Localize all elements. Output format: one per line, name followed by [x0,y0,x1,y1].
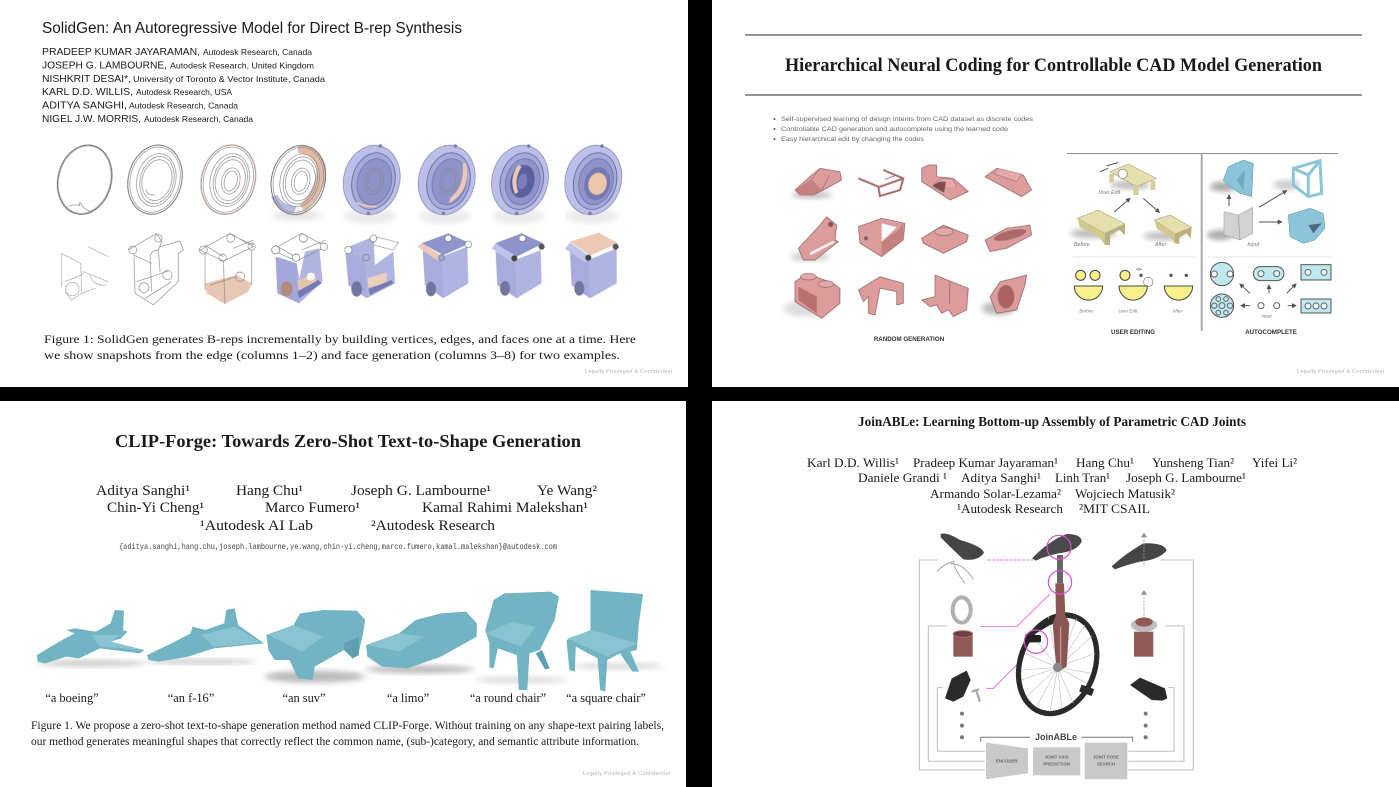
part: seat right [1112,543,1167,569]
author list: Autodesk Research, USA [136,88,233,97]
table: user edit [1109,164,1157,195]
author list [42,47,325,125]
dots left [960,712,964,739]
author names: Aditya Sanghi¹ [961,470,1041,485]
disc stage 6 [411,139,482,224]
figure caption: our method generates meaningful shapes that correctly reflect the common name, (sub-)category, and semantic attribute information. [31,736,639,748]
magenta connector lines [980,560,1050,688]
disc stage 8 [558,139,629,224]
bracket: JoinABLe [981,732,1133,742]
figure: autocomplete: Input [1247,242,1260,248]
shape captions: “a round chair” [470,691,546,705]
figure: user editing [1070,163,1193,314]
author names: Aditya Sanghi¹ [96,483,190,499]
figure: user editing: After [1171,309,1183,314]
bullet list [774,116,1034,143]
shape: square chair [566,590,643,692]
bracket stage 4 [272,233,328,303]
email address: {aditya.sanghi,hang.chu,joseph.lambourne,ye.wang,chin-yi.cheng,marco.fumero,kamal.malekshan}@autodesk.com [119,543,557,552]
bracket stage 8 [565,233,619,298]
unicycle frame [1025,534,1082,673]
shape: round chair [485,592,559,690]
bracket stage 1 [62,247,108,300]
table: before [1077,210,1125,245]
shape captions: “an suv” [282,691,326,705]
author names: Hang Chu¹ [236,483,303,499]
bracket: JoinABLe: JoinABLe [1035,732,1077,742]
panel: JoinABLe paper [712,401,1399,787]
part: seat clamp left [937,562,973,583]
bullet list: Easy hierarchical edit by changing the codes [781,136,925,143]
author names: Hang Chu¹ [1076,455,1134,470]
bracket stage 7 [492,233,545,298]
shape: input grey [1224,207,1253,240]
figure caption [31,720,664,748]
part: pedal right [1130,678,1167,701]
author names: Wojciech Matusik² [1075,486,1175,501]
smiley: user edit [1119,267,1153,300]
block: joint axis prediction: JOINT AXIS [1045,755,1069,760]
footer note: Legally Privileged & Confidential [1297,369,1384,375]
author list: ADITYA SANGHI, [42,101,127,112]
author names: Ye Wang² [537,483,597,499]
figure caption: Figure 1: SolidGen generates B-reps incrementally by building vertices, edges, and faces one at a time. Here [44,334,636,346]
footer note: Legally Privileged & Confidential [585,369,672,375]
disc stage 7 [484,139,556,224]
author names: Joseph G. Lambourne¹ [1126,470,1246,485]
block: joint pose search [1085,743,1127,779]
panel: CLIP-Forge paper [0,401,686,787]
figure: user editing: Before [1079,309,1093,314]
grey connector lines [919,560,1193,770]
figure: user editing: Before [1074,242,1090,248]
smiley: before [1074,270,1103,300]
object 10 [858,277,903,315]
title: JoinABLe: JoinABLe: Learning Bottom-up Assembly of Parametric CAD Joints [858,414,1246,429]
bracket stage 2 [128,233,183,305]
author names: Daniele Grandi ¹ [858,470,947,485]
figure: autocomplete: Input [1261,314,1272,319]
shape: limo [366,612,477,668]
author names: Marco Fumero¹ [265,500,360,516]
shape: top left blue [1223,160,1253,197]
title: CLIP-Forge: CLIP-Forge: Towards Zero-Shot Text-to-Shape Generation [115,431,581,451]
author names [96,483,597,534]
disc stage 5 [336,139,407,224]
object 3 [922,165,968,200]
author names: ²Autodesk Research [371,518,495,534]
block: joint axis prediction [1033,747,1080,775]
author names: Yifei Li² [1252,455,1297,470]
block: encoder: ENCODER [996,759,1018,764]
author names: Karl D.D. Willis¹ [807,455,899,470]
bullet list: Controllable CAD generation and autocomplete using the learned code [781,126,1008,133]
label: user editing: USER EDITING [1111,329,1155,336]
author names: ¹Autodesk AI Lab [200,518,313,534]
axis arrow right top [1141,533,1147,567]
author list: JOSEPH G. LAMBOURNE, [42,61,167,72]
figure: autocomplete [1207,160,1331,319]
figure: user editing: After [1154,242,1166,248]
panel: SolidGen paper [0,0,688,387]
diagrams: 2D shapes [1210,262,1331,317]
part: bolt left [972,689,980,702]
shape captions: “an f-16” [168,691,214,705]
author names: Joseph G. Lambourne¹ [351,483,491,499]
shape: right blue [1288,208,1325,243]
label: random generation: RANDOM GENERATION [874,336,945,343]
part: ring left [953,597,971,623]
author list: Autodesk Research, Canada [144,115,253,124]
author names: Armando Solar-Lezama² [930,486,1061,501]
author list: Autodesk Research, United Kingdom [170,62,314,71]
shape captions: “a limo” [387,691,429,705]
figure: generation stages, columns 5 to 8 [336,139,629,298]
author names: ²MIT CSAIL [1079,501,1150,516]
object 1 [795,168,842,195]
figure: user editing: User Edit [1098,190,1121,196]
author names: Kamal Rahimi Malekshan¹ [422,500,588,516]
author names: Pradeep Kumar Jayaraman¹ [913,455,1058,470]
shape: suv [266,610,365,680]
highlight circles [1024,535,1072,653]
shape: top right blue frame [1293,161,1322,197]
figure: voxel shapes [37,590,664,692]
label: autocomplete: AUTOCOMPLETE [1245,329,1297,336]
bullet list: Self-supervised learning of design intents from CAD dataset as discrete codes [781,116,1034,123]
author list: NISHKRIT DESAI*, [42,74,131,85]
object 9 [795,273,840,318]
title: Hierarchical Neural Coding: Hierarchical Neural Coding for Controllable CAD Model Generation [785,56,1323,76]
bracket stage 3 [199,233,255,304]
disc stage 1 [50,139,119,220]
bracket stage 6 [417,233,472,298]
object 11 [922,275,968,317]
bracket stage 5 [345,235,398,298]
author list: KARL D.D. WILLIS, [42,87,133,98]
author list: Autodesk Research, Canada [203,48,312,57]
part: tube left [953,631,973,657]
part: pedal left [945,671,971,702]
author names: ¹Autodesk Research [957,501,1063,516]
object 4 [985,168,1032,197]
block: joint axis prediction: PREDICTION [1043,762,1070,767]
author list: University of Toronto & Vector Institute, Canada [133,75,325,84]
author list: PRADEEP KUMAR JAYARAMAN, [42,47,200,58]
author names [807,455,1297,516]
footer note: Legally Privileged & Confidential [583,771,670,777]
axis arrow right middle [1141,590,1147,617]
object 12 [990,275,1027,313]
object 5 [798,217,838,260]
dots right [1144,712,1148,739]
disc stage 3 [194,139,263,220]
block: joint pose search: SEARCH [1097,762,1115,767]
panel: Hierarchical Neural Coding paper [712,0,1399,387]
unicycle wheel [1005,604,1110,725]
divider lines [1067,153,1338,331]
author names: Chin-Yi Cheng¹ [107,500,204,516]
shape: f-16 [147,608,264,662]
figure: user editing: User Edit [1118,309,1138,314]
part: seat left [941,533,984,560]
shape captions: “a boeing” [45,691,99,705]
block: encoder [986,743,1028,779]
figure caption: we show snapshots from the edge (columns 1–2) and face generation (columns 3–8) for two examples. [44,350,620,362]
object 2 [858,170,903,196]
author list: NIGEL J.W. MORRIS, [42,114,141,125]
author list: Autodesk Research, Canada [129,102,238,111]
block: joint pose search: JOINT POSE [1093,755,1119,760]
disc stage 4 [264,140,333,220]
figure: random generation grid [783,165,1032,318]
object 6 [858,218,905,257]
disc stage 2 [121,139,189,220]
shape captions: “a square chair” [566,691,646,705]
smiley: user edit: ◂()▸ [1136,267,1142,271]
smiley: after [1164,274,1193,300]
figure: generation stages, columns 1 to 4 [50,139,333,305]
object 7 [922,225,968,253]
diagram: unicycle joint assembly [919,533,1193,779]
shape captions [45,691,646,705]
author names: Linh Tran¹ [1055,470,1110,485]
author names: Yunsheng Tian² [1152,455,1234,470]
figure caption: Figure 1. We propose a zero-shot text-to-shape generation method named CLIP-Forge. Without training on any shape-text pairing labels, [31,720,664,732]
table: after [1154,215,1192,244]
figure caption [44,334,636,362]
part: tube right [1131,617,1157,657]
object 8 [985,225,1032,252]
title: SolidGen: SolidGen: An Autoregressive Model for Direct B-rep Synthesis [42,20,462,37]
shape: boeing [37,610,144,663]
